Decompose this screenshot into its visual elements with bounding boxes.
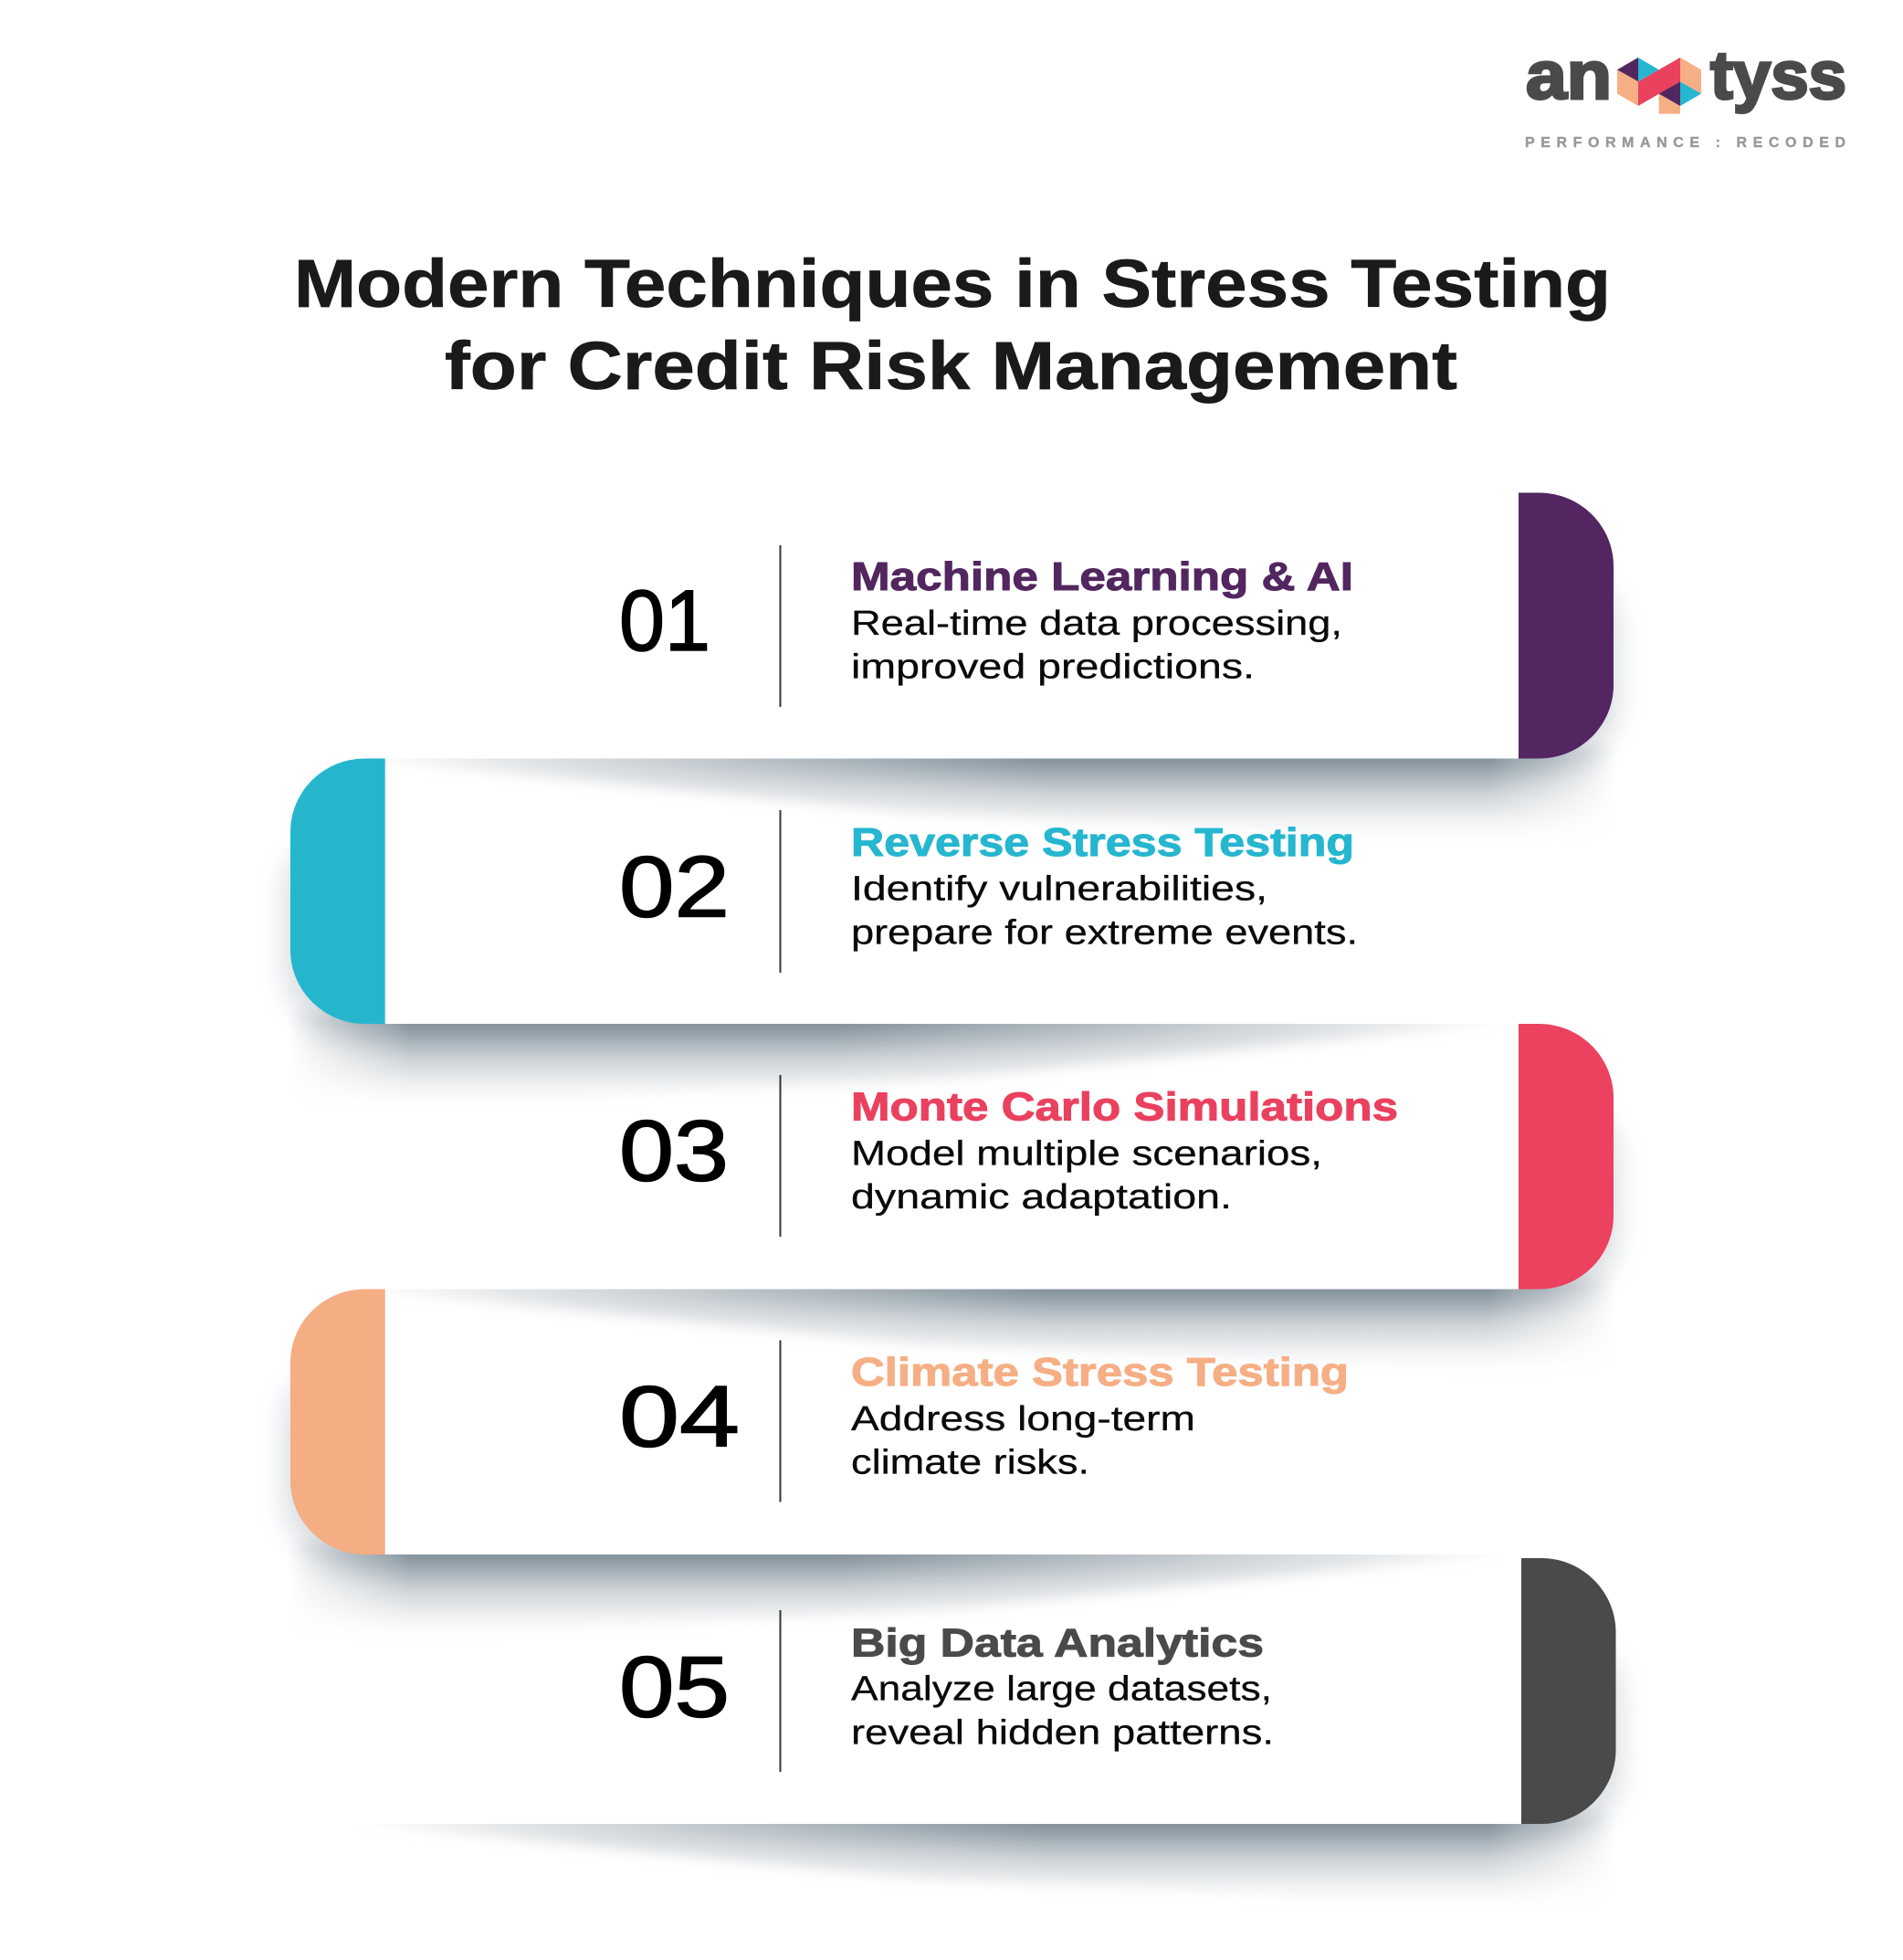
description: reveal hidden patterns. (851, 1713, 1274, 1752)
colour tab (290, 1290, 385, 1554)
card shadows and white card backs (283, 492, 1625, 1906)
panel 01: Machine Learning & AI (619, 493, 1614, 758)
divider (780, 810, 782, 973)
description (851, 1400, 1195, 1481)
description: Identify vulnerabilities, (851, 869, 1267, 908)
logo wordmark: tyss (1710, 37, 1846, 113)
logo wordmark: an (1526, 37, 1612, 113)
description: improved predictions. (851, 648, 1255, 687)
description (851, 1134, 1322, 1217)
colour tab (1519, 493, 1614, 758)
panel 02: Reverse Stress Testing (290, 758, 1358, 1024)
description: Model multiple scenarios, (851, 1134, 1322, 1173)
description (851, 1670, 1274, 1752)
colour tab (1519, 1024, 1614, 1290)
number: 03 (619, 1103, 729, 1200)
colour tab (1521, 1558, 1616, 1824)
logo: anaptyss (1525, 37, 1846, 151)
logo wordmark (1526, 37, 1846, 113)
number: 02 (619, 838, 730, 935)
logo tagline: PERFORMANCE : RECODED (1525, 135, 1845, 151)
heading: Monte Carlo Simulations (851, 1085, 1398, 1129)
description: Analyze large datasets, (851, 1670, 1272, 1708)
heading: Reverse Stress Testing (851, 820, 1354, 865)
number: 05 (619, 1639, 730, 1735)
panel 05: Big Data Analytics (619, 1558, 1616, 1824)
panel 04: Climate Stress Testing (290, 1290, 1349, 1554)
logo mark: hexagon triangles (1617, 58, 1701, 114)
description (851, 605, 1342, 687)
number: 01 (619, 573, 710, 669)
number: 04 (619, 1368, 740, 1465)
description: Address long-term (851, 1400, 1195, 1438)
description: dynamic adaptation. (851, 1178, 1232, 1217)
divider (780, 1610, 782, 1772)
description: prepare for extreme events. (851, 913, 1358, 952)
title: Modern Techniques in Stress Testing (294, 246, 1611, 321)
panel 03: Monte Carlo Simulations (619, 1024, 1614, 1290)
description: climate risks. (851, 1443, 1089, 1481)
heading: Machine Learning & AI (851, 554, 1353, 599)
divider (780, 1341, 782, 1502)
colour tab (290, 758, 385, 1024)
divider (780, 545, 782, 707)
title (294, 246, 1611, 404)
description (851, 869, 1358, 952)
heading: Big Data Analytics (851, 1620, 1264, 1666)
description: Real-time data processing, (851, 605, 1342, 643)
divider (780, 1075, 782, 1237)
title: for Credit Risk Management (445, 328, 1457, 404)
heading: Climate Stress Testing (851, 1350, 1349, 1395)
